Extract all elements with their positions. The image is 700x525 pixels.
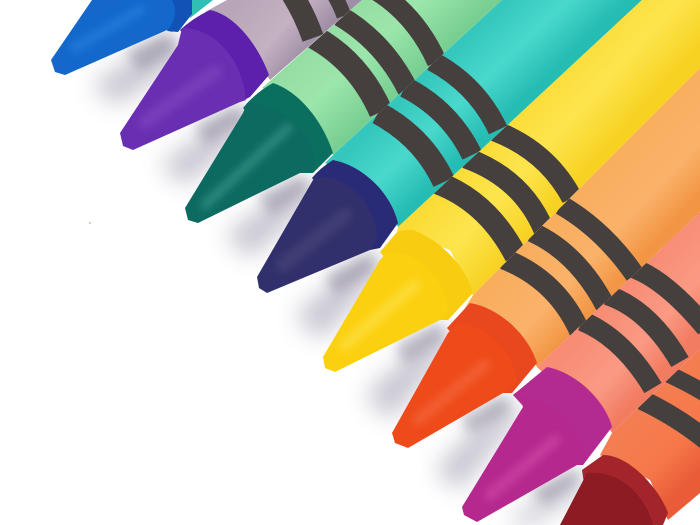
crayon: dark red with orange wrapper xyxy=(560,349,700,525)
crayon: magenta with salmon wrapper xyxy=(462,212,700,522)
crayon: navy with teal wrapper xyxy=(257,0,642,293)
speck on background xyxy=(89,222,91,224)
crayon: blue xyxy=(51,0,213,75)
crayon: purple with mauve wrapper xyxy=(120,0,362,150)
crayon: red-orange with orange wrapper xyxy=(392,68,700,448)
crayon: yellow xyxy=(323,0,700,372)
cast shadows xyxy=(92,32,585,525)
crayon: dark green with light green wrapper xyxy=(185,0,502,223)
